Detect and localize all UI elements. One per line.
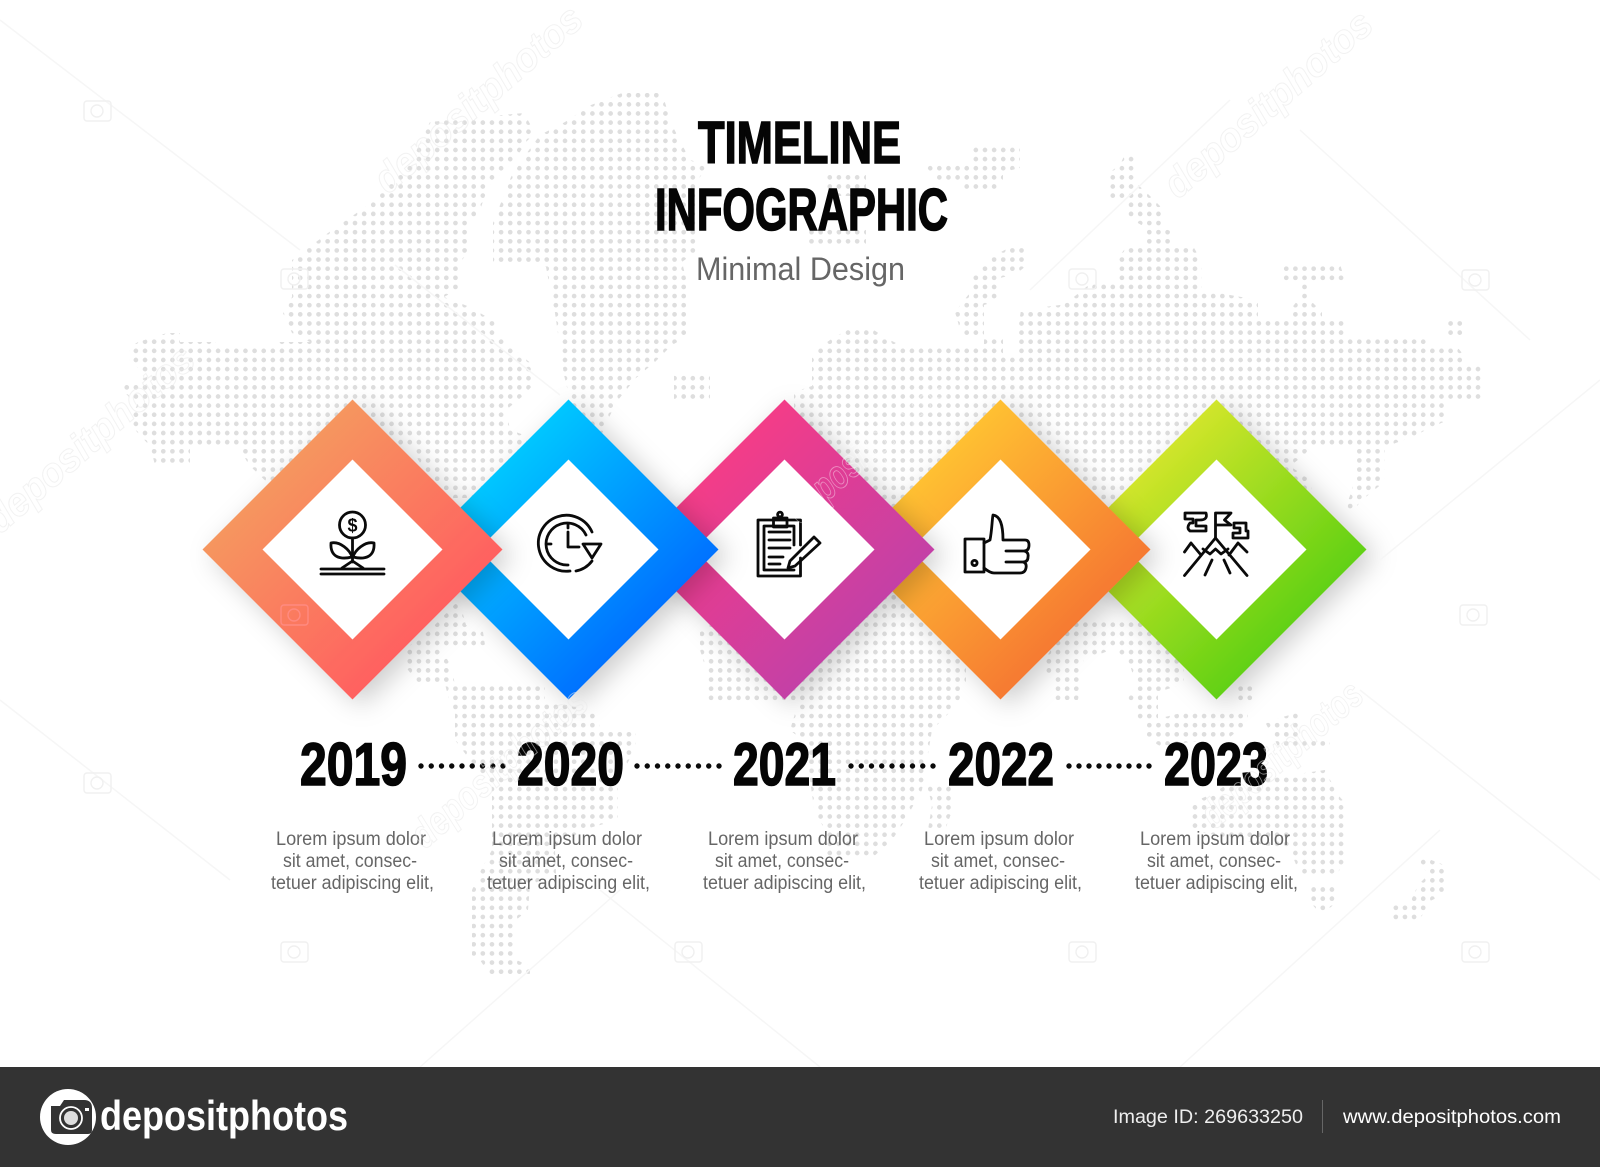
text block: 2022 — [919, 829, 1082, 894]
text block: 2023: sit amet, consec- — [1147, 851, 1281, 872]
year: 2019: 2019 — [300, 731, 407, 798]
text block: 2020: Lorem ipsum dolor — [492, 829, 643, 850]
panel: 2019 diamond — [202, 400, 502, 700]
logo wordmark: depositphotos — [100, 1092, 348, 1139]
panel: 2023 diamond — [1066, 400, 1366, 700]
watermark overlay: depositphotos — [777, 367, 957, 532]
connector: 2021 to 2022 — [851, 763, 934, 769]
image id: Image ID: 269633250 — [1113, 1107, 1303, 1128]
icon: clock with arrow — [538, 515, 601, 571]
footer bar — [0, 1067, 1600, 1167]
title: INFOGRAPHIC — [655, 177, 948, 243]
text block: 2021: Lorem ipsum dolor — [708, 829, 859, 850]
icon: mountain with flag — [1184, 513, 1248, 576]
text block: 2023: Lorem ipsum dolor — [1140, 829, 1291, 850]
watermark overlay: depositphotos — [402, 679, 597, 857]
icon: depositphotos camera logo — [40, 1089, 96, 1145]
text block: 2023 — [1135, 829, 1298, 894]
subtitle: Minimal Design — [696, 251, 905, 287]
year: 2023: 2023 — [1164, 731, 1268, 798]
text block: 2022: Lorem ipsum dolor — [924, 829, 1075, 850]
text block: 2020: sit amet, consec- — [499, 851, 633, 872]
icon: clipboard and pencil — [758, 512, 820, 576]
panel: 2022 diamond — [850, 400, 1150, 700]
panel: 2020 diamond — [418, 400, 718, 700]
text block: 2022: tetuer adipiscing elit, — [919, 873, 1082, 894]
text block: 2020: tetuer adipiscing elit, — [487, 873, 650, 894]
connector: 2019 to 2020 — [421, 763, 504, 769]
text block: 2019: Lorem ipsum dolor — [276, 829, 427, 850]
icon: money plant — [321, 512, 384, 574]
text block: 2020 — [487, 829, 650, 894]
text block: 2019 — [271, 829, 434, 894]
text block: 2019: tetuer adipiscing elit, — [271, 873, 434, 894]
text block: 2021: sit amet, consec- — [715, 851, 849, 872]
title — [655, 110, 948, 243]
text block: 2021 — [703, 829, 866, 894]
connector: 2020 to 2021 — [637, 763, 720, 769]
year: 2022: 2022 — [948, 731, 1054, 798]
icon: money plant: $ — [347, 516, 358, 536]
year: 2021: 2021 — [733, 731, 836, 798]
title: TIMELINE — [698, 110, 901, 176]
text block: 2023: tetuer adipiscing elit, — [1135, 873, 1298, 894]
text block: 2019: sit amet, consec- — [283, 851, 417, 872]
website url: www.depositphotos.com — [1342, 1107, 1561, 1128]
dotted world map — [124, 93, 1480, 974]
watermark overlay: depositphotos — [1192, 672, 1372, 837]
panel: 2021 diamond — [634, 400, 934, 700]
connector: 2022 to 2023 — [1069, 763, 1150, 769]
year: 2020: 2020 — [517, 731, 624, 798]
icon: thumbs up — [965, 515, 1029, 573]
text block: 2022: sit amet, consec- — [931, 851, 1065, 872]
text block: 2021: tetuer adipiscing elit, — [703, 873, 866, 894]
